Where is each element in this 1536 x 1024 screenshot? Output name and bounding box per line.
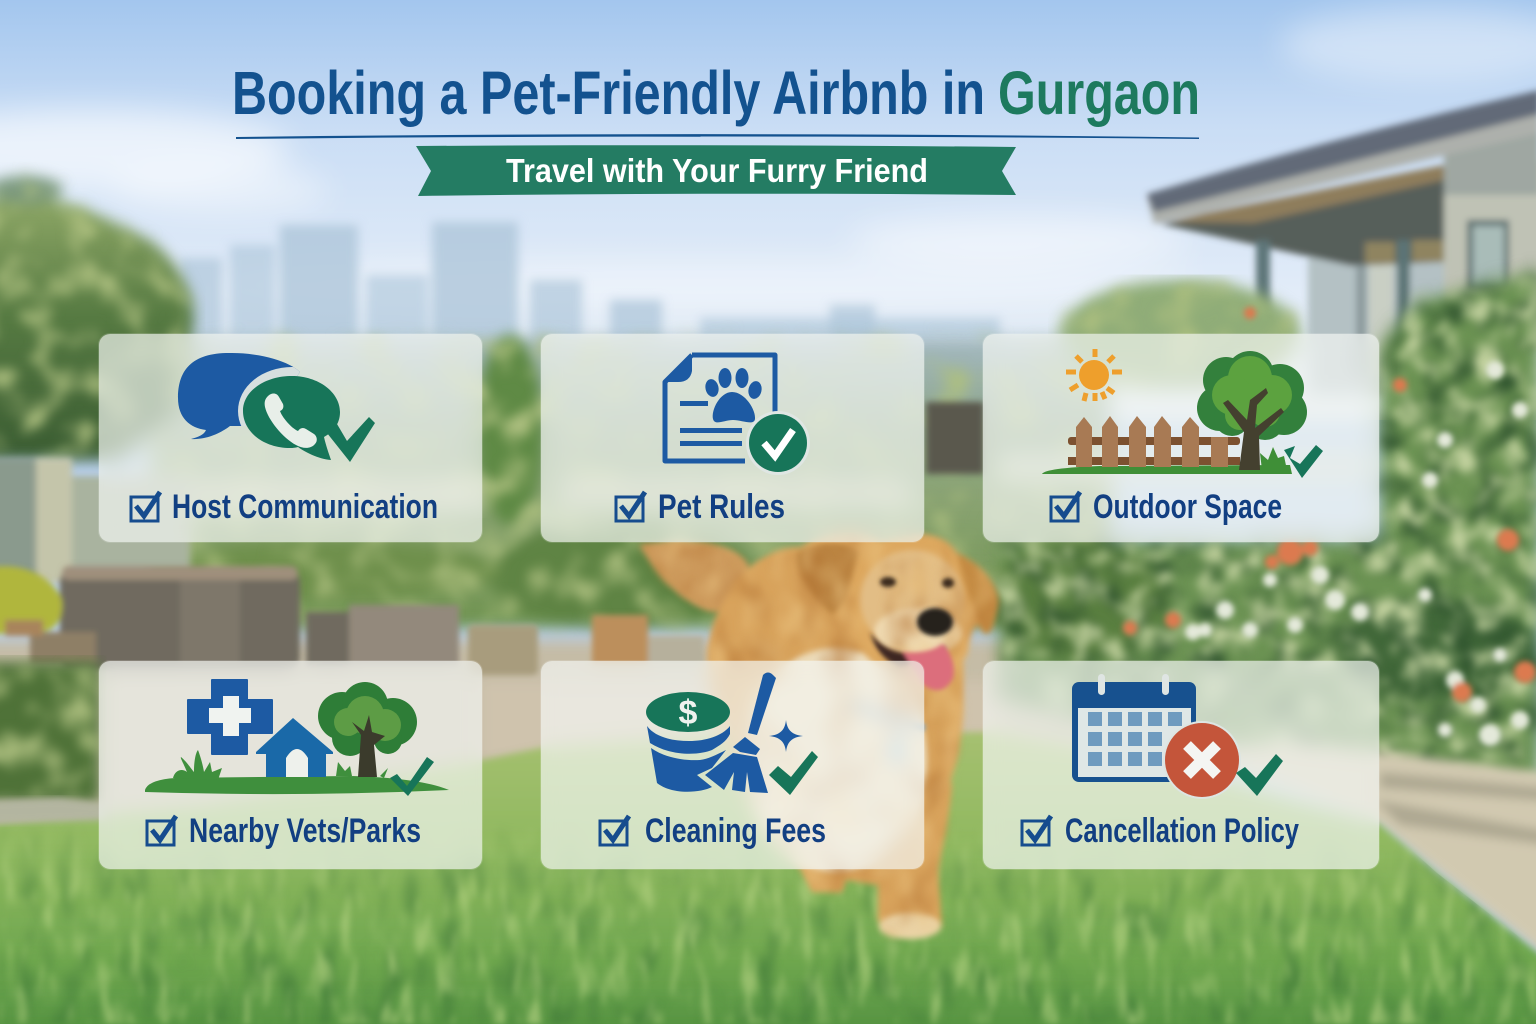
left hedge <box>0 662 100 802</box>
lawn <box>0 732 1536 1024</box>
title text: green part: Gurgaon <box>998 59 1200 127</box>
panel: host communication <box>99 334 482 542</box>
label: pet rules: Pet Rules <box>658 488 785 526</box>
icon: coin bucket, broom and sparkle <box>646 672 818 795</box>
label: cleaning fees <box>600 812 826 850</box>
icon: sun, fence and tree <box>1042 349 1323 478</box>
label: pet rules <box>616 488 785 526</box>
stone path <box>1180 742 1536 975</box>
icon: coin bucket, broom and sparkle: $ <box>679 694 698 732</box>
label: outdoor space: Outdoor Space <box>1093 488 1282 526</box>
clouds <box>0 7 1536 311</box>
label: nearby vets/parks <box>147 812 421 850</box>
icon: vet cross, house and tree <box>145 680 449 796</box>
tub and planters <box>0 566 704 675</box>
subtitle ribbon <box>416 145 1016 196</box>
patio ground <box>0 640 1210 840</box>
left tree <box>0 176 194 460</box>
midground foliage <box>150 335 1110 630</box>
panel: outdoor space <box>983 334 1379 542</box>
golden retriever <box>640 531 998 939</box>
label: cancellation policy: Cancellation Policy <box>1065 812 1299 850</box>
light wall behind panels <box>120 452 1370 512</box>
title text: blue part: Booking a Pet-Friendly Airbnb in <box>232 59 985 127</box>
icon: calendar with red cross <box>1072 674 1283 799</box>
label: outdoor space <box>1051 488 1282 526</box>
city skyline <box>180 222 1000 342</box>
label: host communication <box>131 488 438 526</box>
dog face details <box>850 577 954 767</box>
label: host communication: Host Communication <box>172 488 438 526</box>
icon: pet rules document with paw <box>665 355 810 475</box>
subtitle ribbon: Travel with Your Furry Friend <box>506 152 928 189</box>
distant building between panels <box>926 402 984 474</box>
sky <box>0 0 1536 420</box>
panel: pet rules <box>541 334 924 542</box>
panel: nearby vets/parks <box>99 661 482 869</box>
flowers <box>1123 307 1536 746</box>
left wall and structures <box>0 458 190 583</box>
house <box>1147 90 1536 395</box>
panel: cleaning fees <box>541 661 924 869</box>
right garden bushes <box>990 270 1536 790</box>
icon: chat bubbles with phone <box>178 353 375 462</box>
label: cancellation policy <box>1022 812 1299 850</box>
label: nearby vets/parks: Nearby Vets/Parks <box>189 812 421 850</box>
label: cleaning fees: Cleaning Fees <box>645 812 826 850</box>
panel: cancellation policy <box>983 661 1379 869</box>
title <box>232 59 1200 196</box>
title underline <box>236 134 1199 139</box>
distant bushes behind house <box>1060 280 1300 390</box>
